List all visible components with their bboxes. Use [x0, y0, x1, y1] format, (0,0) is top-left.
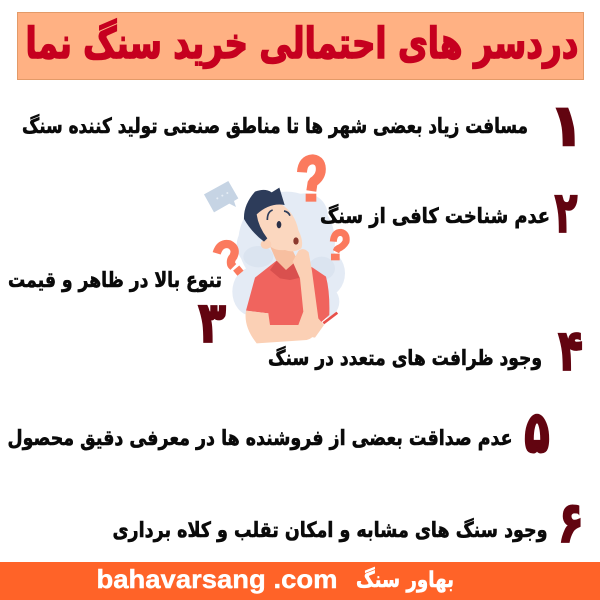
number 3: ۳: [198, 290, 226, 356]
man: lower arm: [246, 311, 313, 343]
footer bar: [0, 562, 600, 600]
item 5: [8, 400, 550, 466]
item 6: [112, 490, 584, 556]
item 4 text: وجود ظرافت های متعدد در سنگ: [268, 345, 542, 370]
item 2 text: عدم شناخت کافی از سنگ: [320, 203, 550, 228]
question mark right: [331, 232, 346, 260]
item 4: [268, 318, 583, 384]
speech bubble: [204, 181, 238, 212]
website address: bahavarsang .com: [96, 564, 338, 594]
man: ear: [261, 240, 271, 249]
man: face details: [267, 210, 299, 245]
item 5 text: عدم صداقت بعضی از فروشنده ها در معرفی دقیق محصول: [8, 426, 512, 450]
item 3: [8, 268, 226, 356]
brand name: بهاور سنگ: [356, 566, 454, 593]
illustration: thinking man with question marks: [204, 159, 346, 343]
man: shirt: [246, 260, 329, 328]
item 1: [22, 93, 584, 159]
number 1: ۱: [550, 93, 584, 159]
man: raised arm: [293, 249, 324, 338]
number 5: ۵: [524, 400, 550, 466]
man: pencil: [323, 313, 337, 323]
question mark top: [302, 159, 321, 202]
man: neck: [267, 240, 297, 270]
background cloud: [232, 192, 345, 318]
man: head: [253, 203, 302, 251]
number 6: ۶: [558, 490, 584, 556]
title banner: [18, 12, 584, 80]
item 3 text: تنوع بالا در ظاهر و قیمت: [8, 268, 222, 292]
number 2: ۲: [554, 180, 578, 246]
man: hair: [244, 188, 285, 242]
number 4: ۴: [558, 318, 583, 384]
item 2: [320, 180, 578, 246]
question mark left: [217, 244, 244, 276]
